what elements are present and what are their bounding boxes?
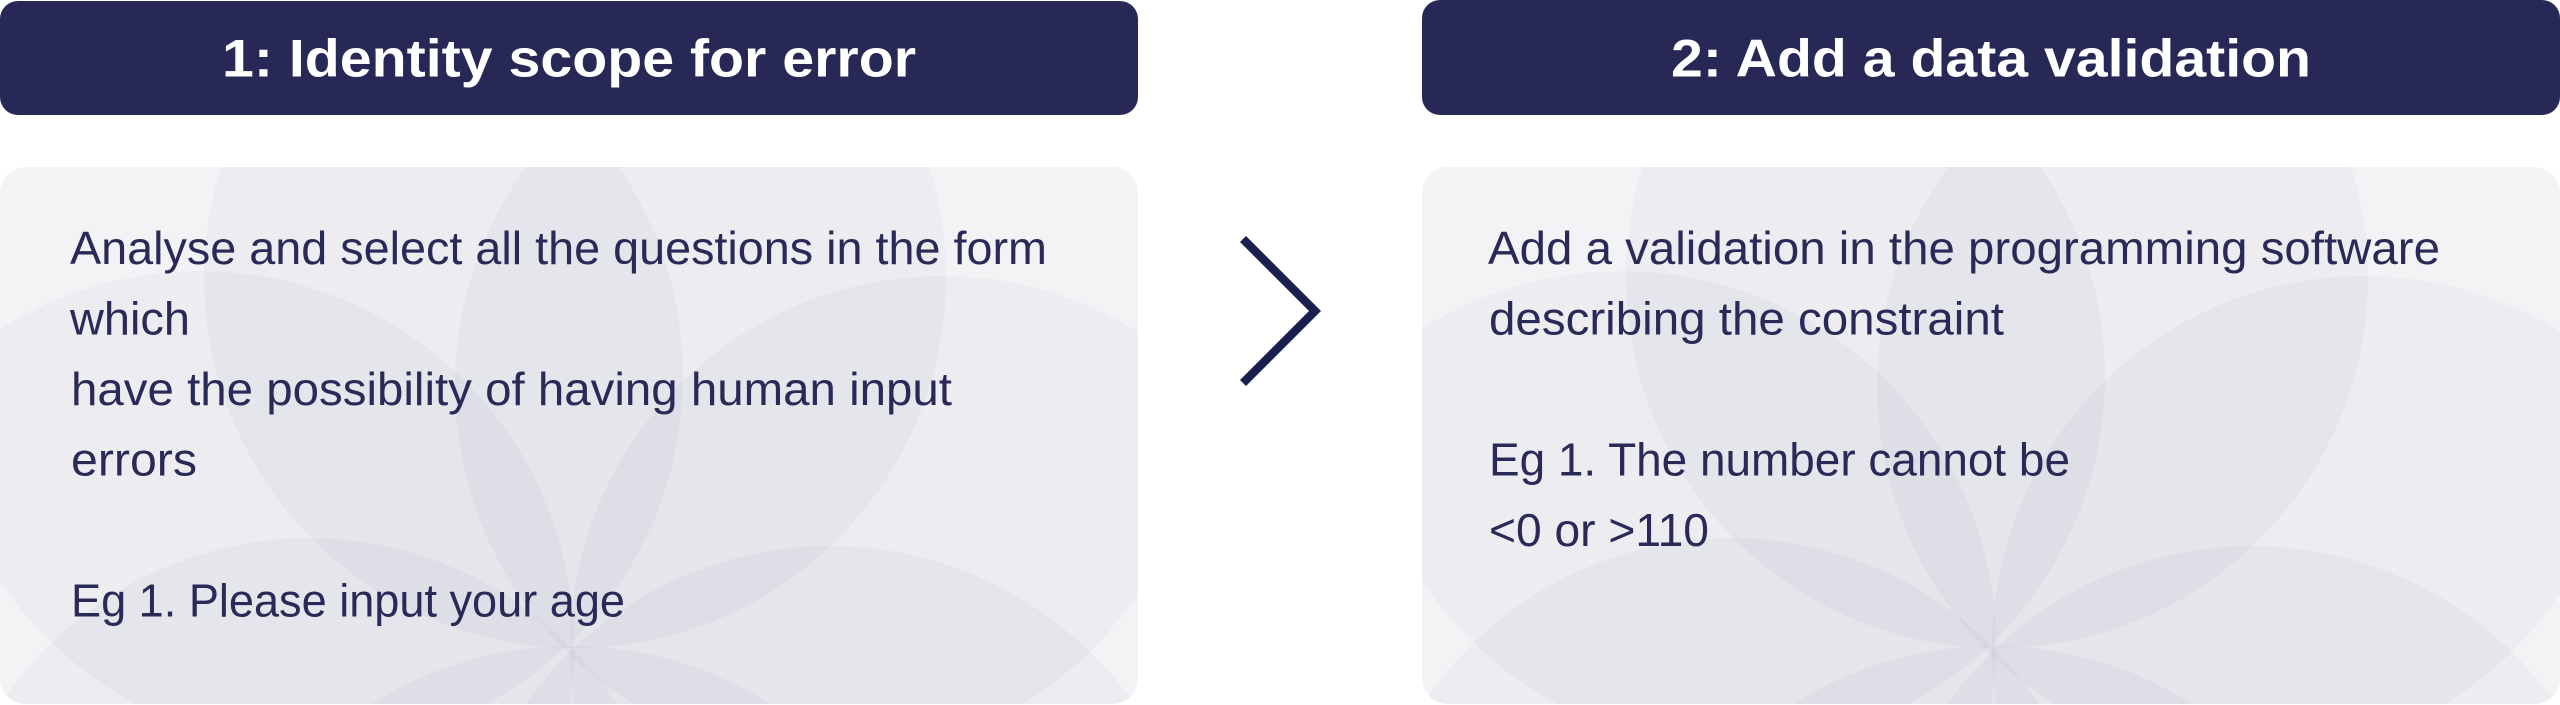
text block: step 2 description: describing the constraint bbox=[1489, 292, 2004, 344]
heading bar: step 2: 2: Add a data validation bbox=[1671, 30, 2311, 88]
text block: step 1 description bbox=[69, 222, 1047, 626]
text block: step 2 description: Add a validation in the programming software bbox=[1488, 222, 2440, 274]
text block: step 1 description: have the possibility of having human input bbox=[71, 363, 952, 415]
text block: step 1 description: Analyse and select all the questions in the form bbox=[70, 222, 1047, 274]
card: step 1 with petal pattern bbox=[0, 167, 1138, 704]
text block: step 1 description: errors bbox=[71, 434, 197, 486]
heading bar: step 1: 1: Identity scope for error bbox=[222, 30, 916, 88]
text block: step 1 description: Eg 1. Please input your age bbox=[71, 574, 625, 626]
card: step 2 with petal pattern bbox=[1422, 167, 2560, 704]
text block: step 1 description: which bbox=[69, 292, 190, 344]
text block: step 2 description: <0 or >110 bbox=[1489, 504, 1709, 556]
panel: step 2 bbox=[1422, 0, 2560, 704]
heading bar: step 1 bbox=[0, 1, 1138, 115]
arrow: step 1 to step 2 bbox=[1243, 239, 1315, 383]
heading bar: step 2 bbox=[1422, 0, 2560, 115]
text block: step 2 description bbox=[1488, 222, 2440, 556]
text block: step 2 description: Eg 1. The number cannot be bbox=[1489, 434, 2070, 486]
panel: step 1 bbox=[0, 1, 1138, 704]
